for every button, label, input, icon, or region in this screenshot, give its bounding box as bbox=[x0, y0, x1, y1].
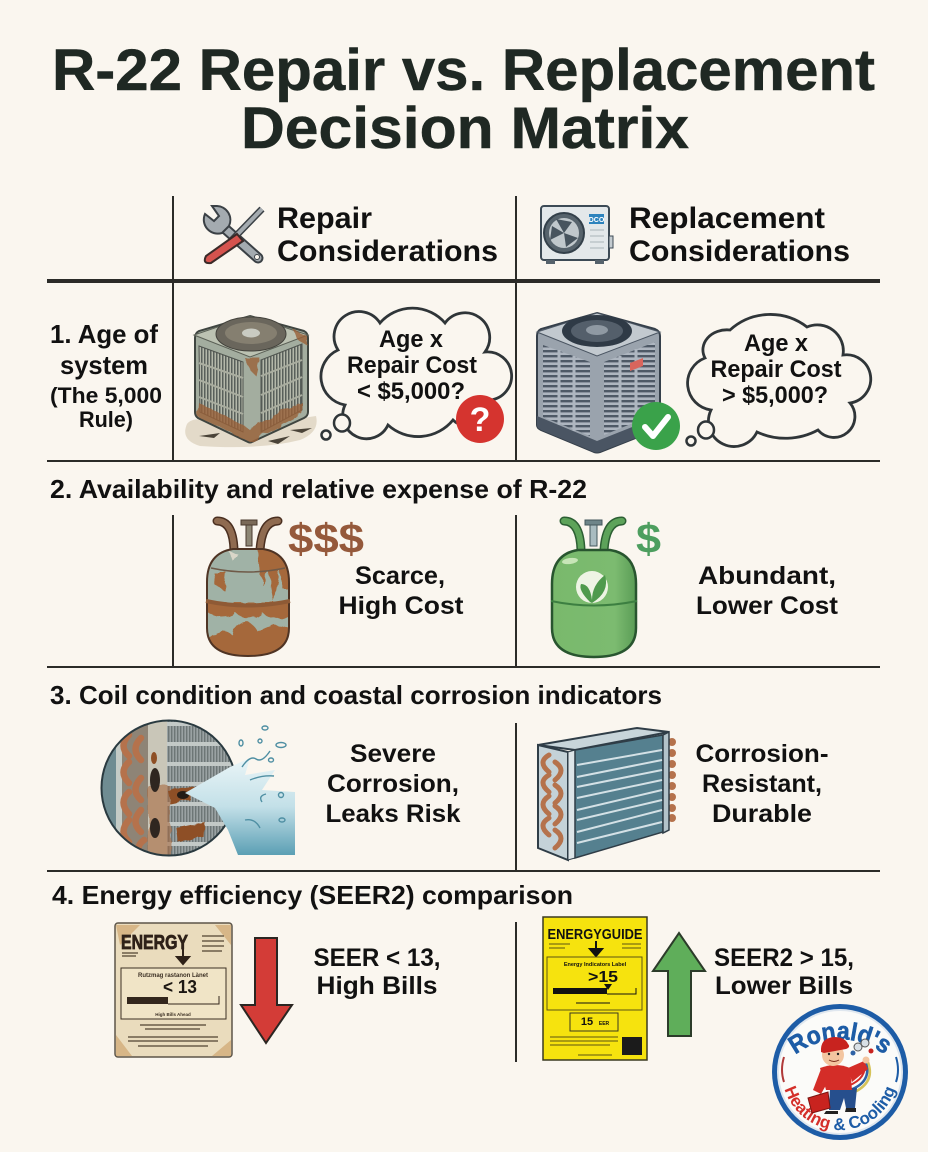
illustration: yellow energy guide label: EER bbox=[599, 1021, 610, 1027]
arrow: up bbox=[653, 933, 705, 1036]
illustration: yellow energy guide label: >15 bbox=[588, 969, 618, 986]
row 1 label: (The 5,000 bbox=[50, 383, 162, 408]
text: severe corrosion: Severe bbox=[350, 740, 436, 768]
text: SEER2 over 15: Lower Bills bbox=[715, 972, 853, 1000]
illustration: old energy label: < 13 bbox=[163, 977, 197, 997]
text: scarce high cost: Scarce, bbox=[355, 562, 445, 590]
text: scarce high cost: High Cost bbox=[338, 592, 464, 620]
thought bubble: replacement: > $5,000? bbox=[722, 382, 828, 409]
row 1 label: Rule) bbox=[79, 407, 133, 432]
column header: replacement: Considerations bbox=[629, 235, 850, 268]
illustration: old energy label: High Bills Ahead bbox=[155, 1012, 191, 1017]
illustration: green cylinder bbox=[551, 520, 637, 657]
row 1 label bbox=[50, 319, 162, 432]
icon: outdoor unit: DCO bbox=[589, 217, 605, 224]
row 4 heading: 4. Energy efficiency (SEER2) comparison bbox=[52, 880, 573, 910]
text: SEER2 over 15: SEER2 > 15, bbox=[714, 944, 854, 972]
text: abundant lower cost: Lower Cost bbox=[696, 592, 839, 620]
column header: replacement bbox=[541, 202, 850, 268]
illustration: rusty cylinder bbox=[205, 520, 292, 660]
text: low cost symbol: $ bbox=[636, 515, 661, 562]
illustration: yellow energy guide label: 15 bbox=[581, 1016, 593, 1028]
row 2 heading: 2. Availability and relative expense of R-22 bbox=[50, 474, 587, 504]
text: severe corrosion bbox=[326, 740, 461, 828]
column header: repair: Considerations bbox=[277, 235, 498, 268]
logo: Ronald's Heating & Cooling: Ronald's bbox=[787, 1022, 890, 1054]
icon: mechanic mascot bbox=[808, 1037, 874, 1114]
illustration: yellow energy guide label bbox=[543, 917, 647, 1060]
thought bubble: replacement: Age x bbox=[744, 330, 809, 357]
thought bubble: repair bbox=[321, 308, 512, 443]
column header: repair: Repair bbox=[277, 202, 372, 235]
text: high cost symbol: $$$ bbox=[288, 515, 364, 562]
illustration: corroded coil with leak bbox=[100, 718, 295, 858]
icon: outdoor unit bbox=[541, 206, 613, 264]
thought bubble: replacement: Repair Cost bbox=[710, 356, 842, 383]
illustration: old energy label: ENERGY bbox=[121, 932, 189, 954]
text: SEER2 over 15 bbox=[714, 944, 854, 1000]
column header: replacement: Replacement bbox=[629, 202, 825, 235]
illustration: yellow energy guide label: Energy Indicators Label bbox=[564, 962, 627, 968]
row 1 label: system bbox=[60, 350, 148, 380]
icon: wrench and screwdriver bbox=[204, 206, 262, 263]
text: scarce high cost bbox=[338, 562, 464, 620]
thought bubble: replacement bbox=[686, 314, 871, 446]
text: severe corrosion: Leaks Risk bbox=[326, 800, 461, 828]
logo: Ronald's Heating & Cooling bbox=[772, 1004, 908, 1140]
thought bubble: repair: Repair Cost bbox=[347, 352, 477, 379]
logo: Ronald's Heating & Cooling: Heating & Cooling bbox=[784, 1086, 898, 1132]
icon: question badge bbox=[456, 395, 504, 443]
text: corrosion resistant: Durable bbox=[712, 800, 812, 828]
illustration: yellow energy guide label: ENERGYGUIDE bbox=[548, 926, 642, 943]
title: Decision Matrix bbox=[241, 96, 689, 161]
illustration: new coil bbox=[538, 728, 676, 860]
text: SEER under 13: High Bills bbox=[316, 972, 438, 1000]
grid lines bbox=[47, 196, 880, 1062]
text: abundant lower cost bbox=[696, 562, 839, 620]
text: severe corrosion: Corrosion, bbox=[327, 770, 459, 798]
text: SEER under 13: SEER < 13, bbox=[314, 944, 440, 972]
arrow: down bbox=[241, 938, 292, 1043]
thought bubble: repair: Age x bbox=[379, 326, 444, 353]
row 3 heading: 3. Coil condition and coastal corrosion indicators bbox=[50, 680, 662, 710]
icon: question badge: ? bbox=[470, 401, 490, 439]
text: SEER under 13 bbox=[314, 944, 440, 1000]
column header: repair bbox=[204, 202, 498, 268]
text: abundant lower cost: Abundant, bbox=[698, 562, 836, 590]
text: corrosion resistant bbox=[696, 740, 828, 828]
title bbox=[52, 38, 875, 161]
title: R-22 Repair vs. Replacement bbox=[52, 38, 875, 103]
illustration: old energy label bbox=[115, 923, 232, 1057]
text: corrosion resistant: Resistant, bbox=[702, 770, 822, 798]
illustration: new AC unit bbox=[537, 313, 660, 452]
row 1 label: 1. Age of bbox=[50, 319, 158, 349]
thought bubble: repair: < $5,000? bbox=[357, 378, 465, 405]
text: corrosion resistant: Corrosion- bbox=[696, 740, 828, 768]
illustration: rusty AC unit bbox=[185, 316, 317, 447]
illustration: old energy label: Rutzmag rastanon Lànet bbox=[138, 973, 208, 979]
icon: green check badge bbox=[632, 402, 680, 450]
